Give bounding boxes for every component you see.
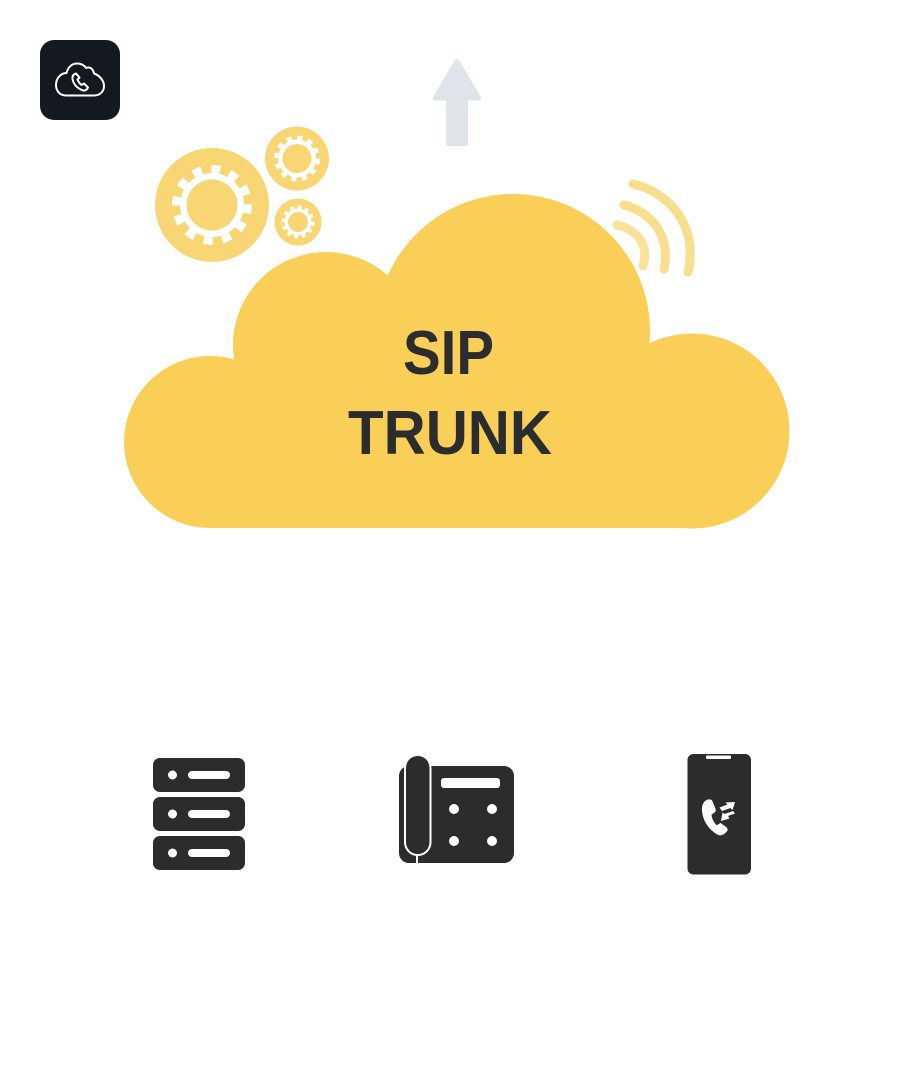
icon: small gear [274,198,322,246]
cloud [124,194,790,528]
icon: mobile phone [688,754,751,874]
icon: large gear [155,148,269,262]
heading: SIP TRUNK [348,319,552,468]
icon: medium gear [265,126,329,190]
heading: SIP TRUNK: SIP [403,319,494,388]
arrow: upward [433,59,481,146]
icon: server stack [153,758,245,870]
logo badge: cloud phone [40,40,120,120]
icon: signal waves [617,184,690,272]
heading: SIP TRUNK: TRUNK [348,399,552,468]
icon: desk phone [399,755,514,863]
